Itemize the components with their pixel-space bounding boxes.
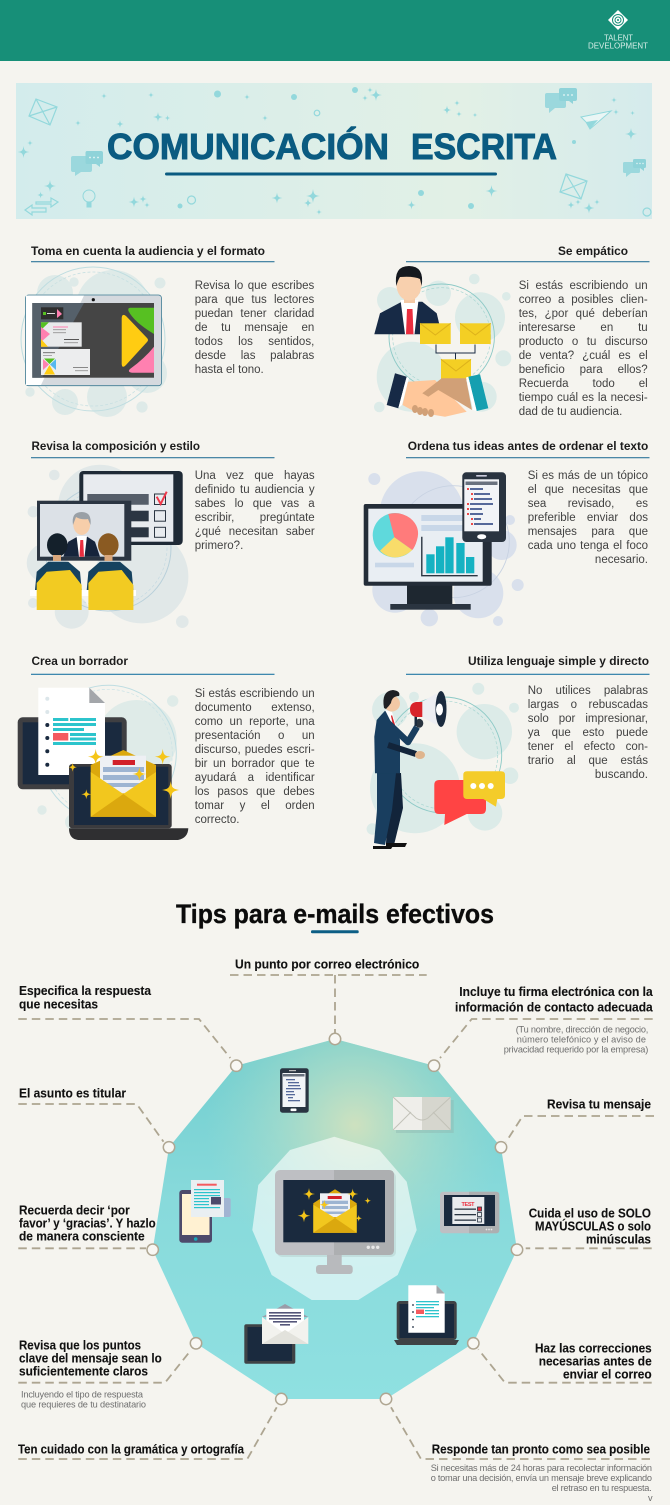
tip: por favor y gracias: Recuerda decir ‘por (19, 1203, 130, 1217)
heading: Se empático (558, 244, 628, 258)
heading: Toma en cuenta la audiencia y el formato (31, 244, 265, 258)
decagon background (153, 1039, 517, 1399)
text: lenguaje simple: largas o rebuscadas (528, 699, 648, 711)
section: audiencia y formato (21, 244, 274, 417)
banner title: ESCRITA (411, 126, 557, 167)
icon: laptop with document (394, 1285, 459, 1345)
banner icon: wire envelopes (29, 99, 587, 199)
text: audiencia y formato: de tu mensaje en (195, 322, 314, 334)
tip: especifica la respuesta: que necesitas (19, 997, 98, 1011)
tip: mayúsculas y minúsculas: Cuida el uso de SOLO (529, 1206, 651, 1220)
tip: correcciones (535, 1342, 652, 1382)
text: ordena tus ideas: cada uno tenga el foco (528, 540, 648, 552)
icon: monitor with test (440, 1192, 499, 1233)
tip: firma electrónica: Incluye tu firma electrónica con la (459, 985, 654, 999)
tip: mayúsculas y minúsculas: minúsculas (586, 1232, 651, 1246)
text: crea un borrador: discurso, puedes escri- (195, 744, 315, 756)
rule (31, 457, 274, 458)
text: lenguaje simple (528, 685, 648, 781)
banner icon: light bulb (83, 190, 95, 207)
banner icon: chat bubbles (71, 88, 646, 177)
text: lenguaje simple: buscando. (595, 769, 648, 781)
text: se empático: dad de tu audiencia. (519, 406, 622, 418)
tip: mayúsculas y minúsculas: MAYÚSCULAS o solo (535, 1218, 651, 1233)
tip: correcciones: Haz las correcciones (535, 1342, 652, 1356)
text: lenguaje simple: No utilices palabras (528, 685, 648, 697)
text: composición y estilo: Una vez que hayas (195, 470, 315, 482)
tip: gramática y ortografía: Ten cuidado con la gramática y ortografía (18, 1443, 245, 1457)
tip: correcciones: enviar el correo (563, 1368, 652, 1382)
illustration: man, envelopes and handshake (374, 266, 511, 417)
tip: especifica la respuesta (19, 984, 152, 1011)
text: se empático: producto o tu discurso (519, 336, 648, 348)
text: crea un borrador: Si estás escribiendo un (195, 688, 315, 700)
tip: correcciones: necesarias antes de (539, 1355, 652, 1369)
text: audiencia y formato: puedan tener claridad (195, 308, 314, 320)
rule (31, 261, 274, 262)
section: se empático (374, 244, 650, 417)
banner icon: paper plane (581, 111, 611, 129)
tip: mayúsculas y minúsculas (529, 1206, 651, 1246)
tip: responde pronto: Si necesitas más de 24 horas para recolectar información (431, 1463, 652, 1473)
logo: Talent Development (588, 10, 648, 50)
tip: responde pronto: v (648, 1493, 653, 1503)
illustration: monitor with charts and phone (364, 471, 524, 626)
banner (16, 83, 652, 219)
tip: un punto por correo: Un punto por correo electrónico (235, 957, 420, 971)
text: se empático: tiempo cuál es la necesi- (519, 392, 648, 404)
tip: responde pronto: Responde tan pronto como sea posible (432, 1443, 650, 1457)
text: lenguaje simple: tener el efecto con- (528, 741, 648, 753)
inner polygon (252, 1137, 417, 1300)
tip: puntos clave: que requieres de tu destinatario (21, 1399, 146, 1409)
heading: Crea un borrador (32, 654, 128, 668)
dashed connectors (18, 975, 654, 1459)
text: composición y estilo: escribir, pregúntate (195, 512, 315, 524)
text: crea un borrador: documento extenso, (195, 702, 315, 714)
tips diagram (18, 975, 654, 1459)
text: ordena tus ideas: mensajes para que (528, 526, 648, 538)
heading: Ordena tus ideas antes de ordenar el texto (408, 439, 649, 453)
tip: firma electrónica: privacidad requerido por la empresa) (504, 1045, 648, 1055)
banner title: COMUNICACIÓN (107, 125, 389, 167)
icon: tablet with document (179, 1180, 231, 1243)
illustration: presentation with audience (27, 465, 189, 629)
banner sparkles and dots (18, 87, 637, 215)
section: lenguaje simple y directo (367, 654, 650, 849)
section: ordena tus ideas (364, 439, 650, 626)
rule (406, 457, 650, 458)
tip: puntos clave: Revisa que los puntos (19, 1338, 141, 1352)
rule (406, 674, 650, 675)
tips title: Tips para e-mails efectivos (176, 899, 494, 929)
tip: firma electrónica: número telefónico y el aviso de (517, 1035, 646, 1045)
text: crea un borrador: bir un borrador que te (195, 758, 315, 770)
tip: responde pronto (431, 1443, 653, 1503)
tip: puntos clave: clave del mensaje sean lo (19, 1351, 162, 1365)
heading: Revisa la composición y estilo (32, 439, 200, 453)
tip: por favor y gracias (19, 1203, 156, 1243)
illustration: draft document and envelope on laptops (18, 685, 188, 840)
tip: firma electrónica: información de contacto adecuada (455, 1001, 654, 1015)
text: audiencia y formato: desde las palabras (195, 350, 314, 362)
tip: por favor y gracias: de manera consciente (19, 1229, 145, 1243)
text: audiencia y formato: para que tus lectores (195, 294, 314, 306)
tip: revisa tu mensaje: Revisa tu mensaje (547, 1097, 651, 1111)
text: composición y estilo: primero?. (195, 540, 243, 552)
text: crea un borrador: correcto. (195, 814, 239, 826)
text: lenguaje simple: trario al que estás (528, 755, 648, 767)
illustration: tablet (21, 267, 167, 417)
text: se empático: Si estás escribiendo un (519, 280, 648, 292)
text: composición y estilo: definido tu audiencia y (195, 484, 315, 496)
tip: puntos clave: suficientemente claros (19, 1364, 148, 1378)
text: se empático: Recuerda todo el (519, 378, 648, 390)
tip: el asunto es titular: El asunto es titular (19, 1086, 126, 1100)
rule (31, 674, 274, 675)
text: crea un borrador: como un reporte, una (195, 716, 315, 728)
text: audiencia y formato: Revisa lo que escribes (195, 280, 314, 292)
text: crea un borrador: tomar y el orden (195, 800, 315, 812)
heading: Utiliza lenguaje simple y directo (468, 654, 649, 668)
text: ordena tus ideas: el que necesitas que (528, 484, 648, 496)
text: ordena tus ideas: Si es más de un tópico (528, 470, 648, 482)
text: crea un borrador: los pasos que debes (195, 786, 315, 798)
text: se empático: interesarse en tu (519, 322, 648, 334)
text: lenguaje simple: ya que esto puede (528, 727, 648, 739)
banner rings (188, 110, 651, 216)
tip: especifica la respuesta: Especifica la respuesta (19, 984, 152, 998)
text: se empático: de venta? ¿cuál es el (519, 350, 648, 362)
text: se empático: tes, ¿por qué deberían (519, 308, 648, 320)
text: ordena tus ideas (528, 470, 648, 566)
section: composición y estilo (27, 439, 275, 629)
tip: firma electrónica: (Tu nombre, dirección de negocio, (516, 1025, 648, 1035)
icon: grey envelope (393, 1097, 454, 1133)
rule (406, 261, 650, 262)
text: crea un borrador: presentación o un (195, 730, 315, 742)
illustration: man with megaphone (367, 683, 519, 849)
icon: monitor with test: TEST (462, 1202, 475, 1208)
text: composición y estilo: sabes lo que vas a (195, 498, 315, 510)
text: lenguaje simple: solo por impresionar, (528, 713, 648, 725)
tip: puntos clave (19, 1338, 162, 1409)
text: ordena tus ideas: preferible enviar dos (528, 512, 648, 524)
tip: por favor y gracias: favor’ y ‘gracias’. Y hazlo (19, 1216, 156, 1230)
text: crea un borrador (194, 688, 315, 826)
banner title (107, 125, 557, 167)
banner underline (165, 172, 497, 176)
tip: responde pronto: o tomar una decisión, envía un mensaje breve explicando (431, 1473, 652, 1483)
section: crea un borrador (18, 654, 274, 840)
text: ordena tus ideas: sea revisado, es (528, 498, 648, 510)
connector nodes (147, 1033, 523, 1405)
tip: firma electrónica (455, 985, 654, 1055)
logo: Talent Development: TALENT (604, 32, 633, 42)
text: se empático: beneficio para ellos? (519, 364, 648, 376)
text: audiencia y formato: todos los sentidos, (195, 336, 314, 348)
tip: puntos clave: Incluyendo el tipo de respuesta (21, 1389, 144, 1399)
text: audiencia y formato: hasta el tono. (195, 364, 264, 376)
icon: tablet with open envelope (244, 1304, 308, 1364)
text: ordena tus ideas: necesario. (595, 554, 648, 566)
header bar (0, 0, 670, 61)
text: se empático (518, 280, 648, 418)
logo: Talent Development: DEVELOPMENT (588, 40, 648, 50)
text: audiencia y formato (194, 280, 314, 376)
text: composición y estilo (195, 470, 315, 552)
tip: responde pronto: el retraso en tu respuesta. (552, 1483, 652, 1493)
text: se empático: correo a posibles clien- (519, 294, 648, 306)
banner icon: arrows (25, 198, 58, 215)
icon: phone (280, 1068, 309, 1113)
text: composición y estilo: ¿qué necesitan saber (195, 526, 315, 538)
text: crea un borrador: ayudará a identificar (195, 772, 315, 784)
icon: central monitor with envelope (275, 1170, 396, 1274)
